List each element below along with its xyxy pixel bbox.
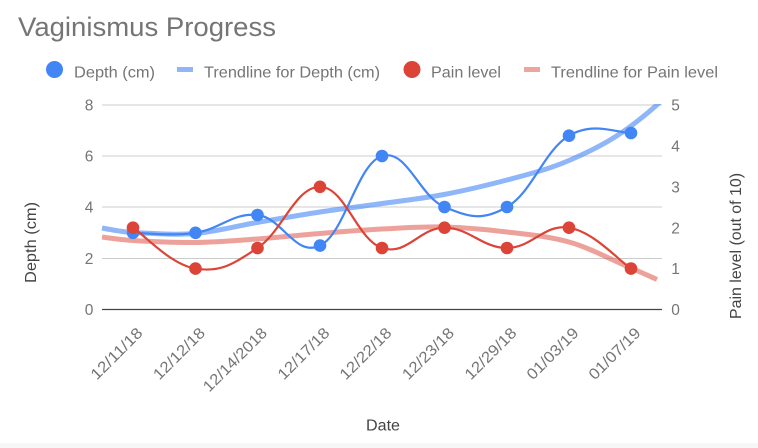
left axis tick labels: 4 [85,200,94,216]
legend item: Trendline for Depth: Trendline for Depth (cm) [204,64,380,82]
x axis baseline [102,308,662,310]
x axis date labels: 12/22/18 [337,325,395,383]
legend [46,61,718,82]
left axis tick labels [85,98,94,319]
trendline: pain level [102,227,657,280]
x axis date labels: 12/29/18 [462,325,520,383]
left axis title: Depth (cm) [23,202,40,283]
x axis date labels: 12/14/2018 [200,325,271,396]
x axis title: Date [366,418,400,434]
legend item: Pain level: Pain level [431,64,501,82]
right axis title: Pain level (out of 10) [728,173,745,319]
title: Vaginismus Progress [18,12,276,42]
series: pain level [127,180,637,275]
x axis date labels [88,325,644,396]
legend item: Trendline for Pain level: Trendline for Pain level [551,64,718,82]
gridlines [102,105,662,258]
right axis tick labels: 3 [671,180,680,196]
left axis tick labels: 2 [85,251,93,268]
x axis date labels: 12/17/18 [275,325,333,383]
legend item: Depth [46,61,155,82]
left axis tick labels: 6 [85,148,93,166]
x axis date labels: 12/12/18 [150,325,209,383]
left axis tick labels: 8 [85,98,93,114]
right axis tick labels: 1 [671,261,680,278]
right axis tick labels [671,98,680,319]
trendline: depth [102,102,660,234]
legend item: Depth: Depth (cm) [74,64,155,82]
x axis date labels: 12/23/18 [399,325,458,383]
x axis date labels: 01/03/19 [524,325,582,383]
right axis tick labels: 2 [671,220,680,238]
right axis tick labels: 0 [671,302,680,319]
right axis tick labels: 5 [671,98,680,114]
legend item: Pain level [404,61,501,82]
left axis tick labels: 0 [85,302,94,319]
x axis date labels: 12/11/18 [88,325,146,383]
series: depth [127,127,637,252]
right axis tick labels: 4 [671,138,680,156]
x axis date labels: 01/07/19 [586,325,644,383]
